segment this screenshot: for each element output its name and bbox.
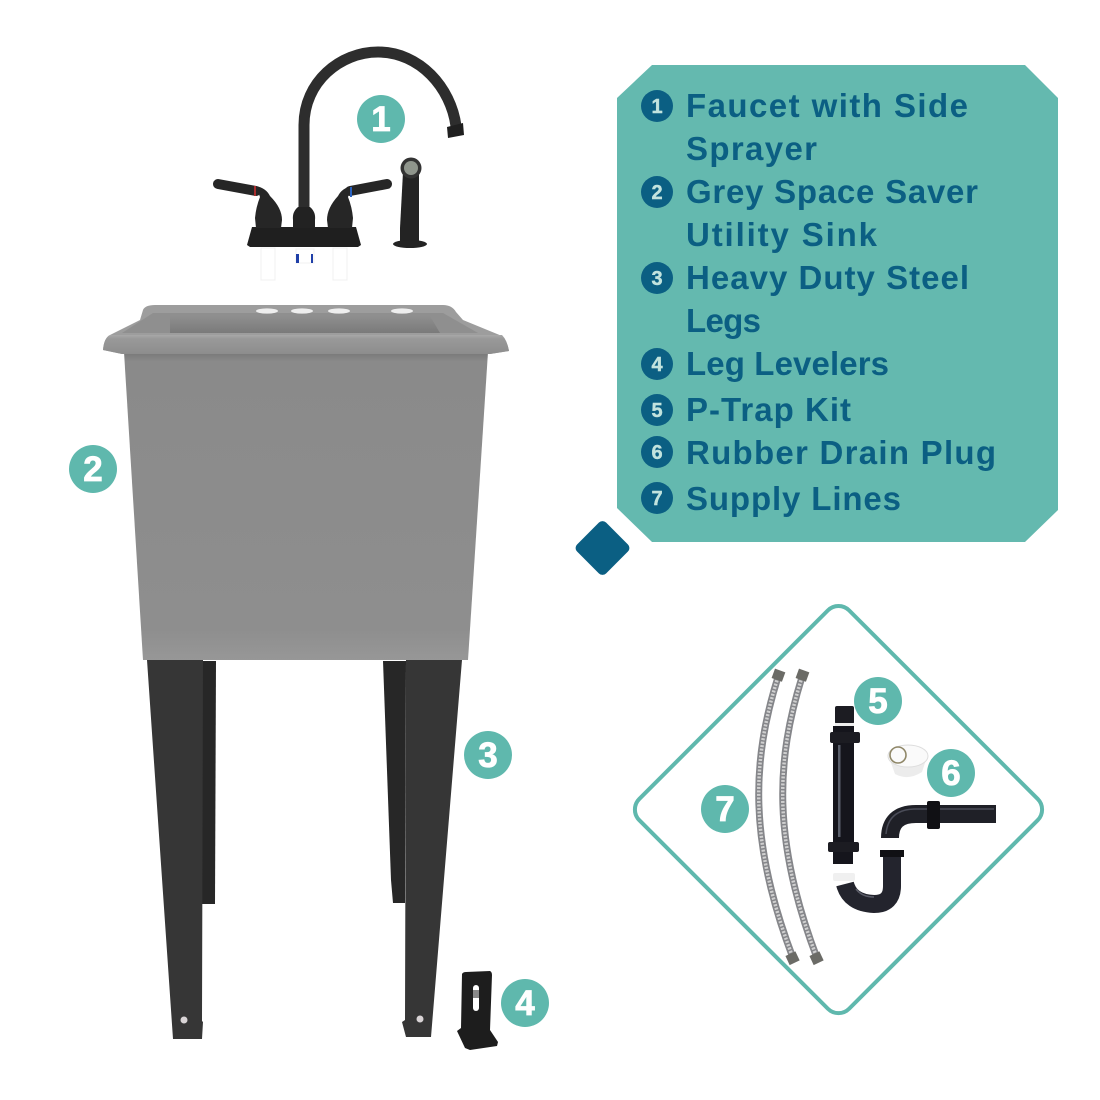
item 5: 5 — [651, 400, 663, 422]
leg leveler — [457, 971, 498, 1050]
right leg — [402, 660, 462, 1037]
drain plug — [888, 745, 928, 777]
item 4: Leg Levelers — [686, 345, 889, 382]
badge 1 — [357, 95, 405, 143]
left leg — [147, 660, 203, 1039]
item 3 — [641, 259, 969, 339]
item 2 — [641, 173, 978, 253]
center collar — [293, 207, 315, 228]
badge 3: 3 — [478, 736, 498, 775]
badge 6: 6 — [941, 754, 961, 793]
blue marks — [296, 254, 313, 263]
badge 5: 5 — [868, 682, 888, 721]
badge 6 — [927, 749, 975, 797]
badge 7: 7 — [715, 790, 735, 829]
item 3: 3 — [651, 268, 663, 290]
badge 5 — [854, 677, 902, 725]
badge 2: 2 — [83, 450, 103, 489]
left handle — [218, 184, 282, 228]
item 2: 2 — [651, 182, 663, 204]
item 1: Faucet with Side — [686, 87, 968, 124]
item 1 — [641, 87, 968, 167]
legend panel — [617, 65, 1058, 542]
item 1: 1 — [651, 96, 663, 118]
spout — [304, 52, 464, 212]
badge 1: 1 — [371, 100, 391, 139]
item 6: 6 — [651, 442, 663, 464]
item 7: 7 — [651, 488, 663, 510]
p-trap u-bend — [833, 850, 904, 904]
sink illustration — [103, 305, 509, 1039]
hose 1 — [759, 669, 800, 965]
back leg sides — [202, 661, 406, 904]
side sprayer — [393, 158, 427, 248]
item 6: Rubber Drain Plug — [686, 434, 996, 471]
badge 3 — [464, 731, 512, 779]
trap elbow — [886, 801, 996, 838]
badge 4 — [501, 979, 549, 1027]
badge 4: 4 — [515, 984, 535, 1023]
hose 2 — [783, 669, 824, 965]
sink basin body — [124, 352, 488, 660]
item 4: 4 — [651, 354, 663, 376]
sink rim — [103, 305, 509, 354]
item 1: Sprayer — [686, 130, 817, 167]
item 7: Supply Lines — [686, 480, 901, 517]
badge 7 — [701, 785, 749, 833]
item 5: P-Trap Kit — [686, 391, 851, 428]
parts diamond frame — [629, 600, 1048, 1019]
item 3: Heavy Duty Steel — [686, 259, 969, 296]
white shanks — [261, 248, 347, 280]
item 3: Legs — [686, 302, 761, 339]
item 2: Grey Space Saver — [686, 173, 978, 210]
item 2: Utility Sink — [686, 216, 878, 253]
decorative navy diamond — [574, 519, 631, 577]
tailpiece tube — [828, 706, 860, 864]
supply lines — [759, 669, 824, 965]
deck plate — [247, 227, 361, 247]
right handle — [327, 184, 387, 228]
badge 2 — [69, 445, 117, 493]
faucet — [218, 52, 464, 280]
